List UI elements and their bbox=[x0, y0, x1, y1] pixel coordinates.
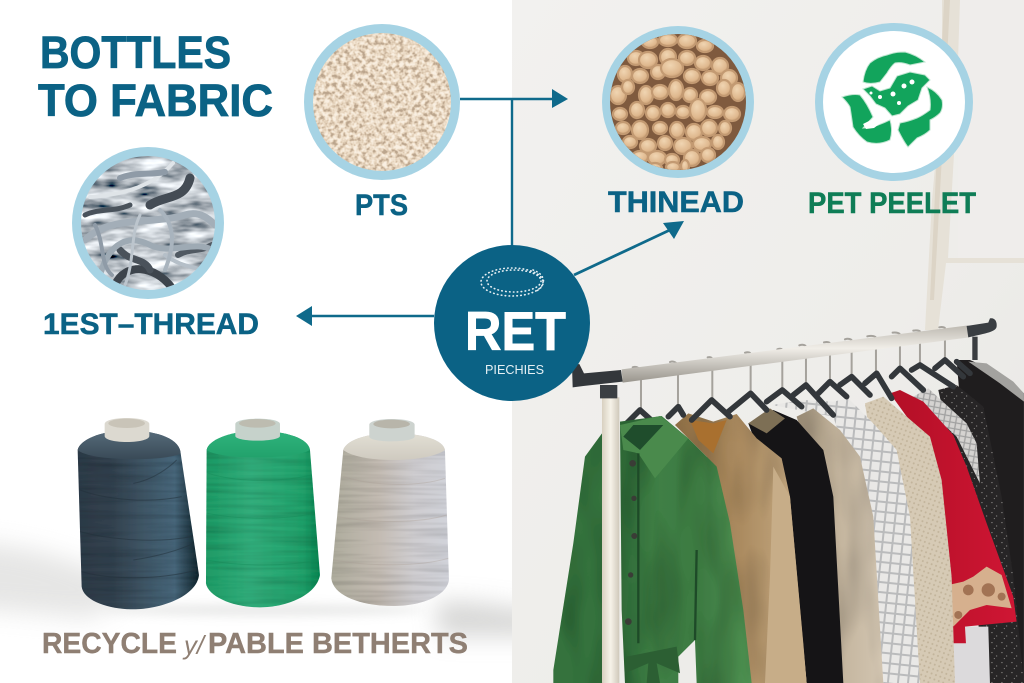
garment: white skirt bbox=[954, 626, 990, 683]
panel: PET pellet recycle bbox=[808, 23, 976, 220]
caption: recyclable bbox=[42, 628, 468, 660]
garment: green shirt body bbox=[620, 416, 752, 683]
caption: recyclable: PABLE BETHERTS bbox=[208, 628, 468, 660]
icon: recycling symbol bbox=[815, 23, 973, 181]
background: left white panel bbox=[0, 0, 512, 683]
garment: striped shirt bbox=[913, 388, 980, 483]
spool: grey bbox=[331, 419, 449, 606]
illustration: clothes rack bbox=[553, 318, 1024, 683]
garment: tan shirt bbox=[675, 413, 807, 683]
garment: green shirt left sleeve bbox=[553, 433, 603, 683]
rack back connector bbox=[972, 336, 978, 360]
garment: red jacket bbox=[890, 390, 1017, 643]
spool: navy bbox=[78, 418, 199, 609]
floor shadows under spools bbox=[0, 542, 540, 636]
spool: green bbox=[206, 419, 320, 607]
hub: RET central circle bbox=[434, 245, 590, 401]
panel: test thread fibres bbox=[43, 147, 259, 341]
garment: check shirt bbox=[772, 398, 920, 683]
arrow: diagonal to thinead bbox=[574, 221, 684, 275]
garment: beige shirt bbox=[797, 408, 883, 683]
label: thinead: THINEAD bbox=[608, 186, 744, 219]
garment: black top bbox=[748, 410, 843, 683]
title: TO FABRIC bbox=[38, 75, 273, 126]
label: PTS: PTS bbox=[355, 189, 408, 222]
garment: knit sweater bbox=[865, 397, 955, 683]
garments: dark coats bbox=[938, 360, 1024, 683]
connector: central vertical line with right arrow to thread bbox=[460, 89, 568, 248]
label: PIECHIES: PIECHIES bbox=[485, 362, 544, 377]
caption: recyclable: y/ bbox=[182, 630, 207, 660]
illustration: spools of thread bbox=[78, 418, 449, 609]
background: right wall panel bbox=[512, 0, 1024, 683]
label: RET: RET bbox=[465, 300, 566, 362]
rack pole bbox=[572, 318, 997, 683]
icon: granule circle bbox=[304, 24, 460, 180]
arrow: left to test thread bbox=[296, 306, 434, 326]
panel: thinead pellets bbox=[602, 26, 754, 219]
title: BOTTLES bbox=[40, 27, 231, 78]
hangers bbox=[633, 327, 945, 410]
garment: lace trim bbox=[948, 567, 1012, 627]
icon: fibre circle bbox=[72, 147, 224, 299]
title bbox=[38, 27, 273, 126]
label: PET PEELET: PET PEELET bbox=[808, 187, 976, 220]
icon: pellet circle bbox=[602, 26, 754, 178]
label: test thread: 1EST–THREAD bbox=[43, 308, 259, 341]
caption: recyclable: RECYCLE bbox=[42, 628, 177, 660]
panel: PTS granules bbox=[304, 24, 460, 222]
icon: dotted rings bbox=[481, 268, 543, 296]
